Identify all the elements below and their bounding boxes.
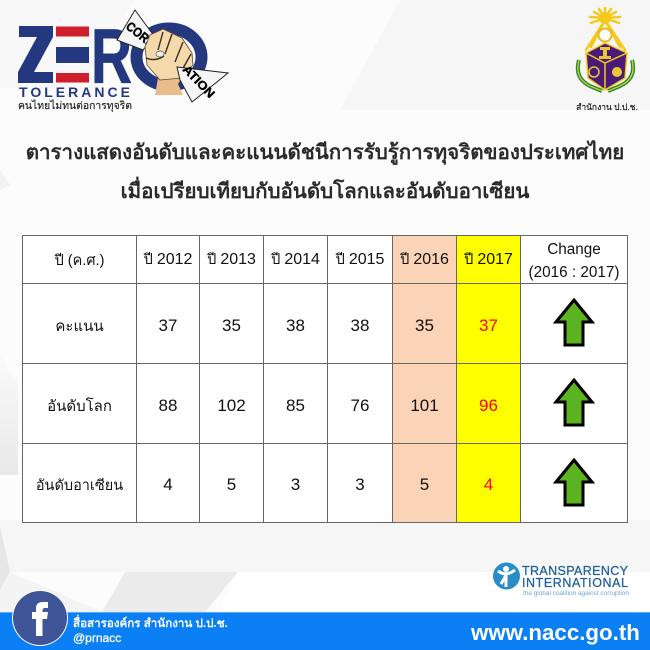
- globe icon: [493, 562, 520, 590]
- row: world rank: อันดับโลก: [47, 398, 112, 414]
- row: world rank: 88: [159, 396, 177, 414]
- row: world rank: [23, 364, 628, 444]
- row: world rank: 96: [479, 396, 498, 414]
- row: ASEAN rank: 4: [163, 475, 173, 494]
- organisation name: INTERNATIONAL: [522, 576, 628, 590]
- logo: Transparency International: [493, 562, 629, 597]
- header row: ปี: [271, 252, 280, 268]
- header row: Change: [547, 241, 601, 258]
- footer social text: [73, 614, 228, 645]
- header row: ปี (ค.ศ.): [55, 253, 104, 269]
- header row: ปี: [336, 252, 345, 268]
- title: เมื่อเปรียบเทียบกับอันดับโลกและอันดับอาเซียน: [121, 180, 529, 202]
- footer social text: สื่อสารองค์กร สำนักงาน ป.ป.ช.: [73, 617, 228, 630]
- row: world rank: 101: [410, 396, 439, 414]
- highlight column 2017: [456, 236, 521, 523]
- icon: green up arrow score: [553, 298, 595, 346]
- row: ASEAN rank: อันดับอาเซียน: [36, 478, 123, 494]
- row: ASEAN rank: [23, 444, 628, 523]
- footer bar: [0, 612, 650, 650]
- row: world rank: 76: [351, 396, 369, 414]
- row: ASEAN rank: 3: [355, 475, 365, 494]
- row: score: คะแนน: [55, 318, 104, 334]
- row: score: 38: [351, 316, 369, 334]
- footer social text: @prnacc: [73, 631, 121, 645]
- swirl: [598, 28, 612, 42]
- header row: [23, 236, 628, 284]
- icon: facebook: [13, 591, 67, 645]
- paper strip bottom: ATION: [180, 62, 218, 101]
- letter R: R: [91, 14, 132, 100]
- row: score: 37: [479, 316, 498, 334]
- header row: 2015: [349, 250, 384, 268]
- icon: green up arrow world rank: [553, 378, 595, 426]
- row: score: [23, 284, 628, 364]
- row: ASEAN rank: 3: [291, 475, 300, 494]
- organisation name: TRANSPARENCY: [522, 564, 629, 578]
- row: score: 37: [159, 316, 177, 334]
- paper strip bottom: [177, 62, 228, 102]
- header row: ปี: [207, 252, 216, 268]
- header row: 2016: [413, 250, 449, 268]
- tolerance text: TOLERANCE: [19, 84, 130, 100]
- row: ASEAN rank: 5: [420, 475, 429, 494]
- header row: ปี: [144, 252, 153, 268]
- organisation name: [522, 564, 629, 590]
- header row: 2013: [220, 250, 256, 268]
- letter E flag bars: [56, 26, 89, 82]
- row: score: 35: [415, 316, 434, 334]
- icon: green up arrow ASEAN rank: [553, 458, 595, 506]
- header row: (2016 : 2017): [528, 264, 620, 281]
- sun crest: [586, 8, 625, 50]
- header row: 2014: [284, 250, 320, 268]
- header row: 2017: [477, 250, 513, 268]
- title: ตารางแสดงอันดับและคะแนนดัชนีการรับรู้การทุจริตของประเทศไทย: [26, 141, 624, 164]
- paper strip top: [117, 10, 159, 51]
- fist: [145, 29, 193, 95]
- header row: ปี: [464, 252, 473, 268]
- title: [26, 140, 624, 202]
- shield symbols: [589, 47, 622, 77]
- row: ASEAN rank: 5: [227, 475, 236, 494]
- row: score: 35: [222, 316, 241, 334]
- green laurels: [578, 60, 633, 91]
- row: world rank: 102: [217, 396, 246, 414]
- row: ASEAN rank: 4: [484, 475, 493, 494]
- data table: [22, 235, 628, 523]
- letter O ring: [136, 28, 202, 86]
- row: score: 38: [286, 316, 305, 334]
- caption: สำนักงาน ป.ป.ช.: [576, 102, 638, 112]
- logo: Zero Tolerance: [18, 9, 230, 112]
- letter Z: [18, 26, 53, 83]
- highlight column 2016: [392, 236, 457, 523]
- paper strip top: CORR: [123, 19, 159, 51]
- logo: NACC emblem: [576, 6, 638, 112]
- tagline: the global coalition against corruption: [523, 590, 629, 597]
- purple shield: [586, 43, 627, 90]
- row: world rank: 85: [286, 396, 305, 414]
- website url: www.nacc.go.th: [471, 620, 640, 645]
- thai tagline: คนไทยไม่ทนต่อการทุจริต: [18, 99, 132, 112]
- header row: ปี: [400, 252, 409, 268]
- header row: 2012: [157, 250, 192, 268]
